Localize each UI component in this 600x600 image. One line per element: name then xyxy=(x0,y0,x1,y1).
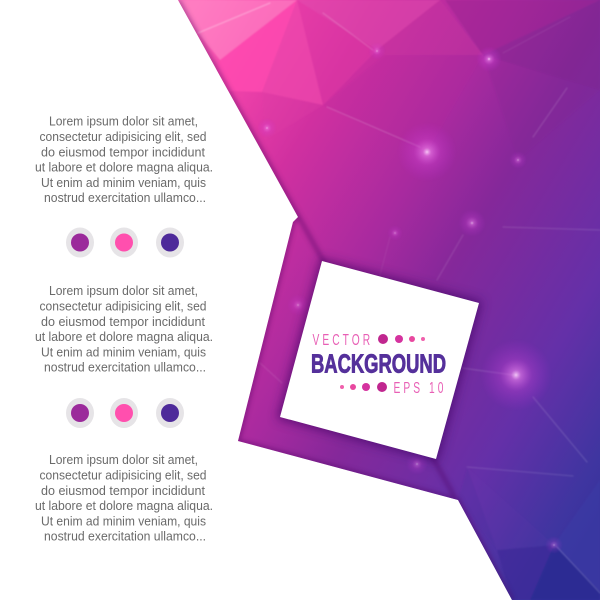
text block 2: do eiusmod tempor incididunt xyxy=(41,315,205,329)
buttons row 1 xyxy=(66,228,184,258)
top dots xyxy=(378,334,425,344)
text block 3: Ut enim ad minim veniam, quis xyxy=(41,514,206,528)
white badge xyxy=(280,261,479,459)
text block 1: consectetur adipisicing elit, sed xyxy=(40,130,206,144)
text block 2: nostrud exercitation ullamco... xyxy=(44,361,206,375)
text block 3: ut labore et dolore magna aliqua. xyxy=(35,499,213,513)
buttons row 2 xyxy=(66,398,184,428)
text block 3: Lorem ipsum dolor sit amet, xyxy=(49,453,198,467)
text block 3: nostrud exercitation ullamco... xyxy=(44,530,206,544)
text block 3: consectetur adipisicing elit, sed xyxy=(40,468,206,482)
text block 1: Lorem ipsum dolor sit amet, xyxy=(49,115,198,129)
square drop shadow xyxy=(280,261,479,459)
text block 1 xyxy=(35,115,213,205)
text block 2: Ut enim ad minim veniam, quis xyxy=(41,345,206,359)
text block 3: do eiusmod tempor incididunt xyxy=(41,484,205,498)
text block 1: ut labore et dolore magna aliqua. xyxy=(35,161,213,175)
text block 3 xyxy=(35,453,213,544)
word: EPS 10: EPS 10 xyxy=(394,379,443,397)
text block 2: ut labore et dolore magna aliqua. xyxy=(35,330,213,344)
inner edge shadow xyxy=(178,0,512,600)
word: VECTOR: VECTOR xyxy=(312,331,370,349)
text block 1: Ut enim ad minim veniam, quis xyxy=(41,176,206,190)
text block 2: Lorem ipsum dolor sit amet, xyxy=(49,284,198,298)
facets: blue bottom area xyxy=(498,546,600,600)
light streaks xyxy=(198,3,600,593)
facets: pink top area xyxy=(180,0,571,105)
text block 1: do eiusmod tempor incididunt xyxy=(41,145,205,159)
text block 1: nostrud exercitation ullamco... xyxy=(44,191,206,205)
glowing nodes xyxy=(257,42,563,554)
text block 2 xyxy=(35,284,213,375)
word: BACKGROUND: BACKGROUND xyxy=(311,348,446,378)
bottom dots xyxy=(340,382,387,392)
text block 2: consectetur adipisicing elit, sed xyxy=(40,300,206,314)
